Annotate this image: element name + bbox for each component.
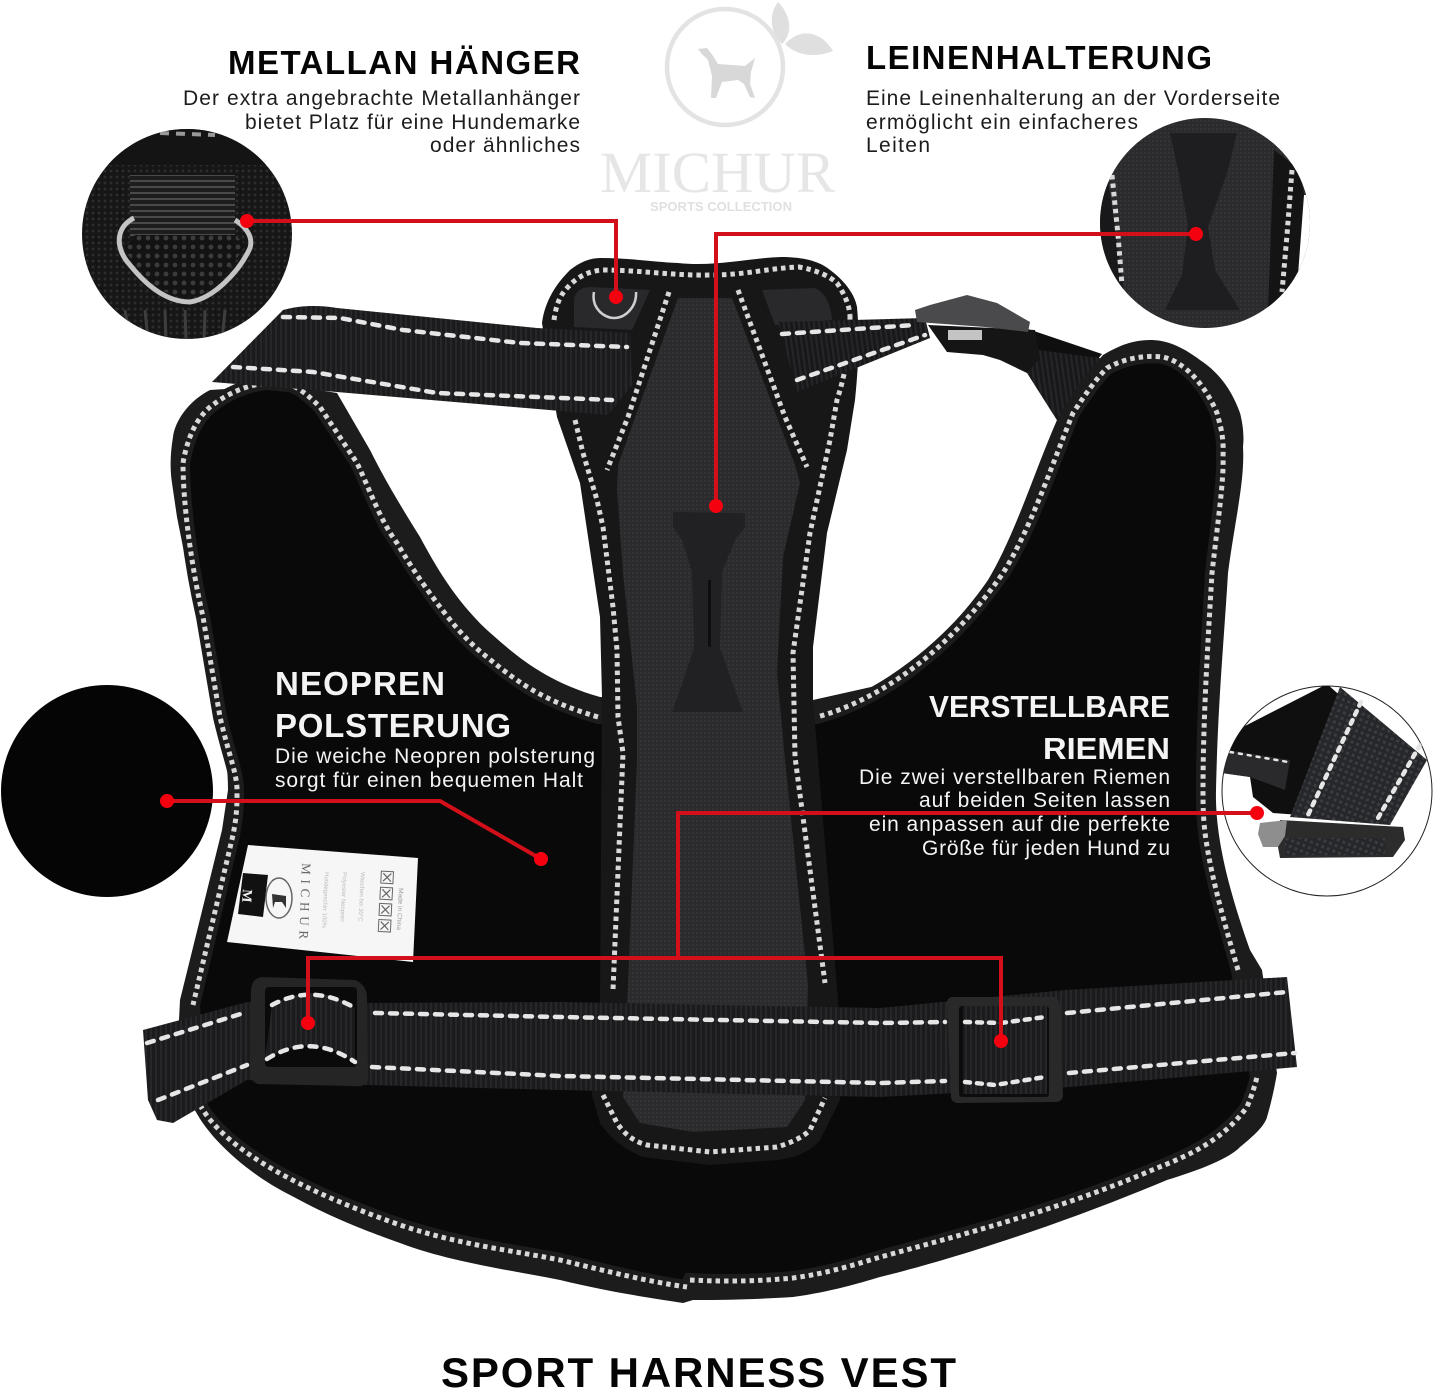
strap stitching: [1308, 702, 1361, 815]
logo: Michur sports collection: [600, 2, 835, 214]
grey padded panel: [617, 298, 808, 1132]
neoprene padding: [183, 356, 1257, 1287]
text: Metallan Hänger description: bietet Platz für eine Hundemarke: [245, 111, 580, 134]
size and care label: Polyester Neopren: [338, 872, 347, 922]
right band: [1268, 150, 1305, 310]
neck padding right: [762, 288, 832, 325]
logo wordmark: MICHUR: [600, 140, 835, 205]
detail circle: neoprene: [1, 685, 213, 897]
text: Verstellbare Riemen description: auf beiden Seiten lassen: [919, 789, 1170, 812]
size and care label: M: [238, 889, 254, 903]
waist strap: [143, 977, 1297, 1123]
lower strap: [125, 310, 225, 340]
left shoulder strap: [212, 306, 632, 415]
text: Verstellbare Riemen description: Die zwei verstellbaren Riemen: [859, 766, 1170, 789]
text: Metallan Hänger description: Der extra angebrachte Metallanhänger: [183, 87, 580, 110]
text: Leinenhalterung description: [866, 87, 1280, 157]
text: Verstellbare Riemen description: ein anpassen auf die perfekte: [869, 813, 1170, 836]
callout line: leash holder: [709, 227, 1203, 513]
right strap buckle: [947, 997, 1063, 1103]
text: Leinenhalterung description: Leiten: [866, 134, 930, 157]
side strap stitching: [1230, 752, 1288, 762]
heading: Verstellbare Riemen: RIEMEN: [1043, 731, 1170, 766]
heading: Neopren Polsterung: NEOPREN: [275, 665, 445, 702]
buckle frame: [1278, 820, 1405, 858]
heading: Neopren Polsterung: POLSTERUNG: [275, 707, 511, 744]
text: Neopren description: sorgt für einen bequemen Halt: [275, 769, 583, 792]
heading: Metallan Hänger: METALLAN HÄNGER: [228, 44, 580, 81]
text: Verstellbare Riemen description: [859, 766, 1170, 860]
detail circle: leash holder: [1095, 115, 1315, 335]
callout line: neoprene: [160, 794, 548, 866]
spine stitching: [554, 267, 850, 1152]
heading: Verstellbare Riemen: [929, 689, 1170, 766]
neck buckle: [915, 295, 1040, 373]
stitching right: [1282, 170, 1292, 292]
holder silhouette: [1165, 133, 1240, 310]
left strap buckle: [250, 977, 368, 1086]
central spine band: [542, 257, 858, 1165]
white gap at edge: [1298, 195, 1310, 272]
webbing background: [80, 125, 295, 345]
heading: Verstellbare Riemen: VERSTELLBARE: [929, 689, 1170, 724]
wing stitching: [183, 383, 598, 1005]
ring loop strap: [130, 175, 235, 237]
buckle inner strap: [1285, 838, 1385, 855]
size and care label: Waschen bei 30°C: [356, 872, 365, 922]
detail circle: adjustable strap: [1222, 684, 1432, 896]
heading: Neopren Polsterung: [275, 665, 511, 744]
text: Metallan Hänger description: [183, 87, 580, 157]
left band: [1100, 182, 1124, 290]
size and care label: MICHUR: [296, 863, 314, 940]
leash holder on spine: [672, 512, 745, 712]
text: Leinenhalterung description: Eine Leinenhalterung an der Vorderseite: [866, 87, 1280, 110]
size and care label: Made in China: [395, 888, 404, 931]
top stitching: [160, 133, 215, 135]
webbing triangle near right wing: [1000, 345, 1100, 425]
D ring: [119, 218, 251, 302]
size and care label: [227, 845, 418, 962]
heading: Leinenhalterung: LEINENHALTERUNG: [866, 39, 1212, 76]
logo tagline: SPORTS COLLECTION: [650, 200, 792, 214]
rope strap to right wing: [1025, 328, 1102, 366]
panel fabric: [1095, 115, 1315, 335]
detail circle: metal ring: [80, 125, 295, 345]
strap webbing: [1290, 687, 1427, 825]
stitching left: [1112, 175, 1122, 285]
logo leaves: [772, 2, 833, 55]
text: Verstellbare Riemen description: Größe für jeden Hund zu: [922, 837, 1170, 860]
logo dog: [698, 48, 755, 98]
logo ring: [667, 9, 783, 125]
harness: product body: [143, 257, 1297, 1303]
metal ring on harness: [594, 292, 636, 318]
callout lines: adjustable straps: [301, 806, 1264, 1048]
ring mesh: [125, 235, 245, 298]
text: Leinenhalterung description: ermöglicht ein einfacheres: [866, 111, 1138, 134]
neck padding left: [574, 287, 650, 330]
size and care label: Hundegeschirr 100%: [320, 872, 329, 929]
text: Neopren description: [275, 745, 595, 792]
buckle grip: [1258, 820, 1287, 847]
text: Metallan Hänger description: oder ähnliches: [430, 134, 580, 157]
text: Neopren description: Die weiche Neopren polsterung: [275, 745, 595, 768]
size and care label: ☒☒☒☒: [374, 869, 397, 934]
neoprene area: [1222, 684, 1345, 815]
bottom stitching: [200, 1105, 687, 1287]
right shoulder strap: [778, 318, 930, 392]
body outline band: [171, 340, 1277, 1303]
right wing stitching: [817, 356, 1238, 970]
side strap: [1222, 750, 1290, 790]
callout line: metal ring: [240, 214, 623, 304]
